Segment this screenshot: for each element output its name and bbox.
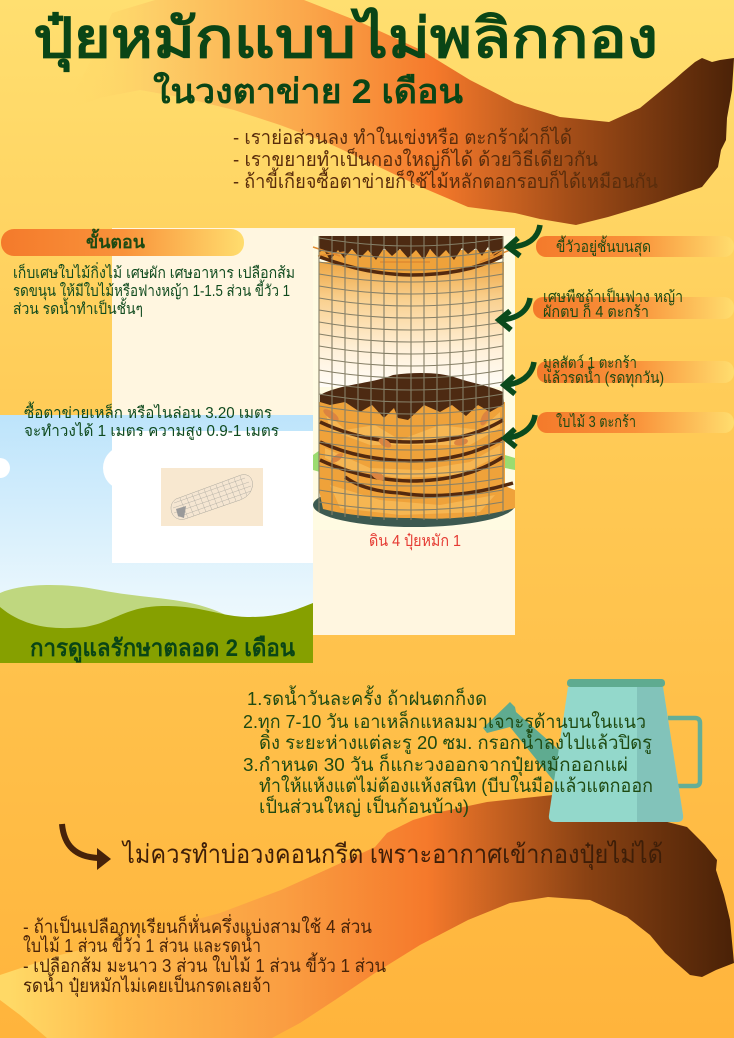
- label pill: plant waste: เศษพืชถ้าเป็นฟาง หญ้า: [543, 287, 683, 306]
- intro bullet list: [233, 125, 658, 193]
- panel: compost backing: [313, 228, 515, 635]
- step text: buy wire mesh: [24, 401, 279, 441]
- top layer leaves: [319, 250, 504, 275]
- arrow: to plant waste layer: [499, 298, 530, 330]
- lighter leaf clusters: [325, 410, 500, 515]
- intro bullet list: - เราย่อส่วนลง ทำในเข่งหรือ ตะกร้าผ้าก็ได้: [233, 125, 572, 149]
- label: soil and compost ratio: ดิน 4 ปุ๋ยหมัก 1: [369, 532, 461, 551]
- label pill: leaves: ใบไม้ 3 ตะกร้า: [556, 413, 636, 431]
- green foliage: [313, 450, 515, 472]
- subtitle: ในวงตาข่าย 2 เดือน: [153, 71, 463, 111]
- tips text: รดน้ำ ปุ๋ยหมักไม่เคยเป็นกรดเลยจ้า: [23, 972, 271, 998]
- care list: ทำให้แห้งแต่ไม่ต้องแห้งสนิท (บีบในมือแล้วแตกออก: [259, 775, 653, 796]
- tips text: - เปลือกส้ม มะนาว 3 ส่วน ใบไม้ 1 ส่วน ขี้วัว 1 ส่วน: [23, 952, 386, 976]
- icon: rolled wire mesh: [161, 468, 263, 526]
- label pill: animal manure: [537, 354, 734, 388]
- label pill: manure on top: [536, 235, 734, 257]
- fallen leaves: [322, 407, 492, 482]
- care list: ดิ่ง ระยะห่างแต่ละรู 20 ซม. กรอกน้ำลงไปแล้วปิดรู: [259, 729, 652, 754]
- empty mesh glow: [319, 262, 504, 387]
- step text: gather materials: ส่วน รดน้ำทำเป็นชั้นๆ: [13, 297, 143, 318]
- step text: gather materials: [13, 262, 295, 318]
- title: ปุ๋ยหมักแบบไม่พลิกกอง: [33, 6, 658, 73]
- steps heading pill: ขั้นตอน: [86, 228, 146, 252]
- label pill: plant waste: ผักตบ ก็ 4 ตะกร้า: [543, 302, 649, 321]
- warning text: ไม่ควรทำบ่อวงคอนกรีต เพราะอากาศเข้ากองปุ๋ยไม่ได้: [121, 840, 663, 870]
- top dark band: [320, 256, 503, 275]
- brush stroke: top: [62, 0, 734, 225]
- step text: buy wire mesh: จะทำวงได้ 1 เมตร ความสูง 0.9-1 เมตร: [24, 422, 279, 441]
- care list: [243, 685, 653, 818]
- care list: 2.ทุก 7-10 วัน เอาเหล็กแหลมมาเจาะรูด้านบนในแนว: [243, 709, 646, 734]
- panel: compost pile illustration: [313, 236, 515, 530]
- panel: sky and hills scene: [0, 415, 313, 663]
- steps heading pill: [1, 228, 244, 256]
- lower leaf body: [319, 402, 515, 519]
- tips text: - ถ้าเป็นเปลือกทุเรียนก็หั่นครึ่งแบ่งสามใช้ 4 ส่วน: [23, 914, 372, 939]
- intro bullet list: - เราขยายทำเป็นกองใหญ่ก็ได้ ด้วยวิธีเดียวกัน: [233, 147, 598, 171]
- step text: buy wire mesh: ซื้อตาข่ายเหล็ก หรือไนล่อน 3.20 เมตร: [24, 401, 272, 422]
- leaf strands top: [313, 244, 512, 262]
- tips text: [23, 914, 386, 998]
- top manure layer: [319, 236, 503, 260]
- step text: gather materials: รดขนุน ให้มีใบไม้หรือฟางหญ้า 1-1.5 ส่วน ขี้วัว 1: [13, 279, 290, 301]
- arrow: to animal manure layer: [504, 362, 534, 394]
- label pill: animal manure: มูลสัตว์ 1 ตะกร้า: [543, 354, 637, 373]
- brush stroke: bottom: [0, 795, 734, 1038]
- care list: เป็นส่วนใหญ่ เป็นก้อนบ้าง): [259, 794, 469, 818]
- compost base soil: [313, 483, 515, 527]
- lower compost bands: [320, 420, 513, 496]
- step text: gather materials: เก็บเศษใบไม้กิ่งไม้ เศษผัก เศษอาหาร เปลือกส้ม: [13, 262, 295, 282]
- care list: 1.รดน้ำวันละครั้ง ถ้าฝนตกก็งด: [247, 685, 487, 709]
- care heading: การดูแลรักษาตลอด 2 เดือน: [30, 635, 296, 663]
- icon: watering can: [483, 679, 700, 822]
- label pill: manure on top: ขี้วัวอยู่ชั้นบนสุด: [556, 235, 651, 257]
- intro bullet list: - ถ้าขี้เกียจซื้อตาข่ายก็ใช้ไม้หลักตอกรอบก็ได้เหมือนกัน: [233, 167, 658, 193]
- lower manure dome: [320, 373, 504, 420]
- label pill: animal manure: แล้วรดน้ำ (รดทุกวัน): [543, 366, 664, 388]
- panel: cream backing: [112, 228, 515, 415]
- arrow: to leaves layer: [505, 415, 535, 447]
- wire mesh: [319, 236, 503, 520]
- arrow: to manure layer: [508, 225, 540, 256]
- label pill: leaves: [537, 412, 734, 433]
- label pill: plant waste: [533, 287, 734, 321]
- arrow: warning pointer: [62, 824, 111, 870]
- care list: 3.กำหนด 30 วัน ก็แกะวงออกจากปุ๋ยหมักออกแผ่: [243, 752, 628, 777]
- tips text: ใบไม้ 1 ส่วน ขี้วัว 1 ส่วน และรดน้ำ: [23, 932, 261, 956]
